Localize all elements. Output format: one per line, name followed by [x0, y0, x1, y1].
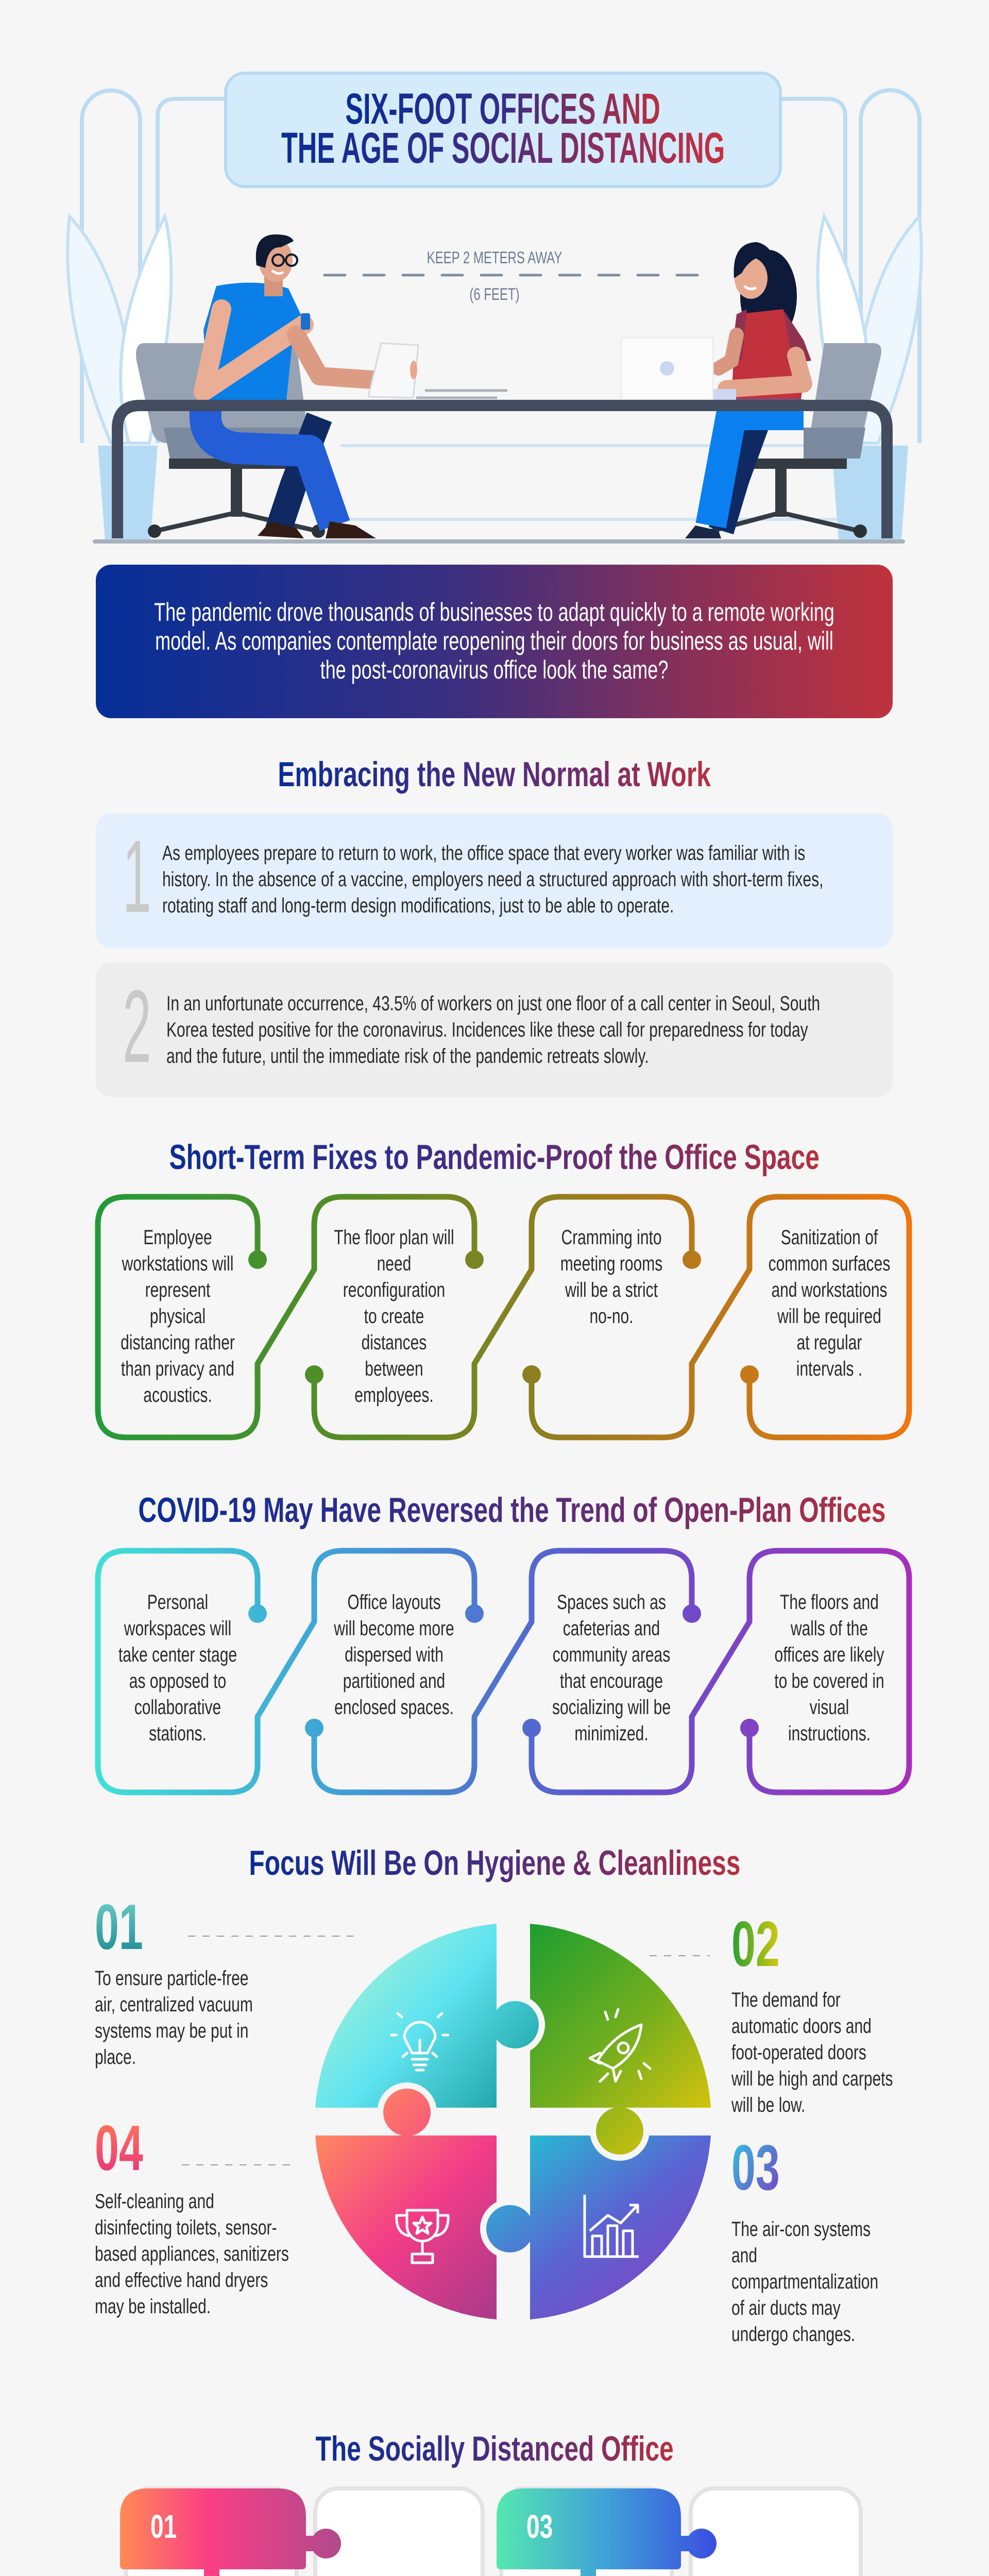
text 02: foot-operated doors: [731, 2041, 866, 2064]
card text: cafeterias: that encourage: [560, 1670, 663, 1692]
heading: socially distanced office: The Socially Distanced Office: [315, 2429, 674, 2468]
quadrant: bottom-left: [315, 2136, 497, 2319]
quadrant: bottom-right: [530, 2136, 711, 2319]
number 01: 01: [95, 1892, 143, 1963]
right chair: [711, 343, 881, 538]
white cards: [126, 2488, 861, 2576]
dashed leaders: [182, 1936, 710, 2165]
text 03: of air ducts may: [731, 2297, 841, 2319]
card text: cafeterias: minimized.: [574, 1722, 649, 1745]
card text: sanitization: common surfaces: [769, 1252, 890, 1275]
card text: personal workspaces: workspaces will: [124, 1617, 231, 1640]
text 2: Korea tested positive for the coronavirus. Incidences like these call for preparedness for today: [166, 1019, 808, 1041]
chart: open-plan zigzag cards: [95, 1548, 912, 1795]
quadrant: top-right: [530, 1924, 711, 2108]
illustration: two workers keeping distance: [66, 88, 923, 544]
text 04: based appliances, sanitizers: [95, 2243, 289, 2265]
heading: short-term fixes: Short-Term Fixes to Pandemic-Proof the Office Space: [169, 1138, 820, 1177]
chart: short-term fixes zigzag cards: [95, 1194, 912, 1440]
card text: floors and walls: instructions.: [788, 1722, 871, 1745]
tab 03: [497, 2488, 717, 2576]
card text: office layouts: enclosed spaces.: [334, 1696, 454, 1719]
text 03: [731, 2218, 878, 2346]
title box: [224, 72, 782, 188]
card text: cafeterias: socializing will be: [552, 1696, 671, 1719]
card text: sanitization: intervals .: [796, 1358, 862, 1380]
card text: workstations: workstations will: [122, 1252, 233, 1275]
card text: floors and walls: visual: [810, 1696, 849, 1719]
intro text: [154, 598, 834, 684]
number 1: 1: [123, 819, 151, 934]
text 04: [95, 2190, 289, 2318]
text 02: will be high and carpets: [731, 2067, 893, 2090]
card text: workstations: than privacy and: [121, 1358, 234, 1380]
text 2: and the future, until the immediate risk of the pandemic retreats slowly.: [166, 1045, 649, 1067]
heading: hygiene: Focus Will Be On Hygiene & Cleanliness: [249, 1843, 740, 1883]
icon: bar chart: [585, 2195, 639, 2257]
text 04: Self-cleaning and: [95, 2190, 214, 2213]
card text: personal workspaces: take center stage: [118, 1643, 237, 1666]
card text: meeting rooms: meeting rooms: [560, 1252, 662, 1275]
text 1: rotating staff and long-term design modifications, just to be able to operate.: [162, 894, 674, 917]
text 03: and: [731, 2244, 757, 2267]
laptops: [368, 337, 736, 400]
text 1: history. In the absence of a vaccine, employers need a structured approach with short-term fixes,: [162, 868, 823, 891]
tab label 01: 01: [150, 2508, 177, 2545]
text 02: [731, 1989, 893, 2116]
text 03: The air-con systems: [731, 2218, 871, 2241]
number 03: 03: [731, 2132, 780, 2204]
card text: floors and walls: The floors and: [780, 1591, 879, 1614]
text 02: The demand for: [731, 1989, 841, 2011]
card text: meeting rooms: will be a strict: [565, 1279, 658, 1301]
text 1: [162, 842, 823, 917]
floor line: [95, 539, 903, 544]
text 01: systems may be put in: [95, 2020, 248, 2042]
card text: floor plan: The floor plan will: [334, 1226, 454, 1249]
card text: cafeterias: cafeterias and: [563, 1617, 660, 1640]
woman: [685, 242, 811, 538]
text 04: may be installed.: [95, 2295, 211, 2318]
card text: cafeterias: [552, 1591, 671, 1745]
man: [203, 234, 379, 538]
card text: floors and walls: to be covered in: [774, 1670, 884, 1692]
panel: point 2: [96, 962, 893, 1097]
card text: personal workspaces: Personal: [147, 1591, 208, 1614]
chart: socially distanced puzzle cards: [0, 2473, 989, 2576]
card text: floors and walls: offices are likely: [775, 1643, 884, 1666]
card text: workstations: represent: [145, 1279, 210, 1301]
card text: workstations: Employee: [143, 1226, 212, 1249]
text 03: undergo changes.: [731, 2323, 855, 2346]
text 1: As employees prepare to return to work, the office space that every worker was familiar with is: [162, 842, 805, 865]
heading: covid-19 open plan: COVID-19 May Have Reversed the Trend of Open-Plan Offices: [138, 1490, 885, 1530]
icon: trophy: [397, 2210, 448, 2263]
heading: embracing the new normal: Embracing the New Normal at Work: [278, 755, 711, 794]
text 04: and effective hand dryers: [95, 2269, 268, 2292]
title: THE AGE OF SOCIAL DISTANCING: [281, 124, 725, 172]
text 03: compartmentalization: [731, 2270, 878, 2293]
distance marker: [325, 274, 700, 276]
card text: meeting rooms: no-no.: [589, 1305, 634, 1328]
text: keep 2 meters away: KEEP 2 METERS AWAY: [427, 248, 562, 267]
table: [117, 405, 887, 538]
text 2: [166, 992, 820, 1067]
card text: floor plan: need: [377, 1252, 411, 1275]
card text: workstations: distancing rather: [121, 1331, 235, 1354]
card text: floor plan: [334, 1226, 454, 1406]
card text: personal workspaces: as opposed to: [129, 1670, 226, 1692]
card text: floor plan: reconfiguration: [343, 1279, 445, 1301]
window frames: [82, 90, 919, 519]
card text: meeting rooms: [560, 1226, 662, 1328]
intro banner: [96, 565, 893, 718]
chart: hygiene puzzle circle: [182, 1924, 711, 2319]
card text: floor plan: employees.: [354, 1384, 434, 1406]
number 2: 2: [123, 969, 151, 1084]
number 04: 04: [95, 2113, 143, 2184]
card text: personal workspaces: [118, 1591, 237, 1745]
card text: meeting rooms: Cramming into: [561, 1226, 662, 1249]
intro text: The pandemic drove thousands of businesses to adapt quickly to a remote working: [154, 598, 834, 626]
tab label 03: 03: [526, 2508, 553, 2545]
card text: workstations: [121, 1226, 235, 1406]
card text: sanitization: at regular: [797, 1331, 862, 1354]
card text: office layouts: Office layouts: [347, 1591, 441, 1614]
text 01: air, centralized vacuum: [95, 1993, 253, 2016]
card text: floor plan: distances: [362, 1331, 427, 1354]
title: SIX-FOOT OFFICES AND: [346, 84, 660, 133]
card text: workstations: physical: [150, 1305, 206, 1328]
text 01: [95, 1967, 253, 2069]
icon: rocket: [590, 2009, 650, 2081]
text 02: automatic doors and: [731, 2015, 872, 2038]
text: 6 feet: (6 FEET): [469, 285, 520, 303]
plants: [67, 216, 922, 541]
card text: personal workspaces: stations.: [149, 1722, 207, 1745]
card text: personal workspaces: collaborative: [134, 1696, 221, 1719]
card text: cafeterias: community areas: [553, 1643, 670, 1666]
card text: sanitization: will be required: [777, 1305, 881, 1328]
tab 01: [120, 2488, 341, 2576]
card text: floors and walls: [774, 1591, 884, 1745]
text 2: In an unfortunate occurrence, 43.5% of workers on just one floor of a call center in Seoul, South: [166, 992, 820, 1015]
card text: sanitization: and workstations: [771, 1279, 888, 1301]
text 01: place.: [95, 2046, 136, 2069]
card text: office layouts: dispersed with: [345, 1643, 444, 1666]
left chair: [136, 343, 325, 538]
text 04: disinfecting toilets, sensor-: [95, 2216, 277, 2239]
number 02: 02: [731, 1909, 780, 1980]
card text: sanitization: [769, 1226, 890, 1380]
panel: point 1: [96, 814, 893, 948]
text 01: To ensure particle-free: [95, 1967, 248, 1990]
card text: cafeterias: Spaces such as: [557, 1591, 666, 1614]
card text: office layouts: [334, 1591, 454, 1719]
card text: office layouts: will become more: [334, 1617, 454, 1640]
icon: light bulb: [391, 2013, 448, 2070]
card text: floors and walls: walls of the: [791, 1617, 868, 1640]
intro text: model. As companies contemplate reopening their doors for business as usual, will: [155, 626, 833, 655]
card text: floor plan: between: [365, 1358, 423, 1380]
quadrant: top-left: [315, 1924, 497, 2108]
card text: office layouts: partitioned and: [343, 1670, 445, 1692]
card text: floor plan: to create: [364, 1305, 424, 1328]
title: [281, 84, 725, 172]
card text: sanitization: Sanitization of: [781, 1226, 878, 1249]
intro text: the post-coronavirus office look the same?: [320, 655, 668, 684]
card text: workstations: acoustics.: [143, 1384, 212, 1406]
text 02: will be low.: [731, 2094, 805, 2116]
